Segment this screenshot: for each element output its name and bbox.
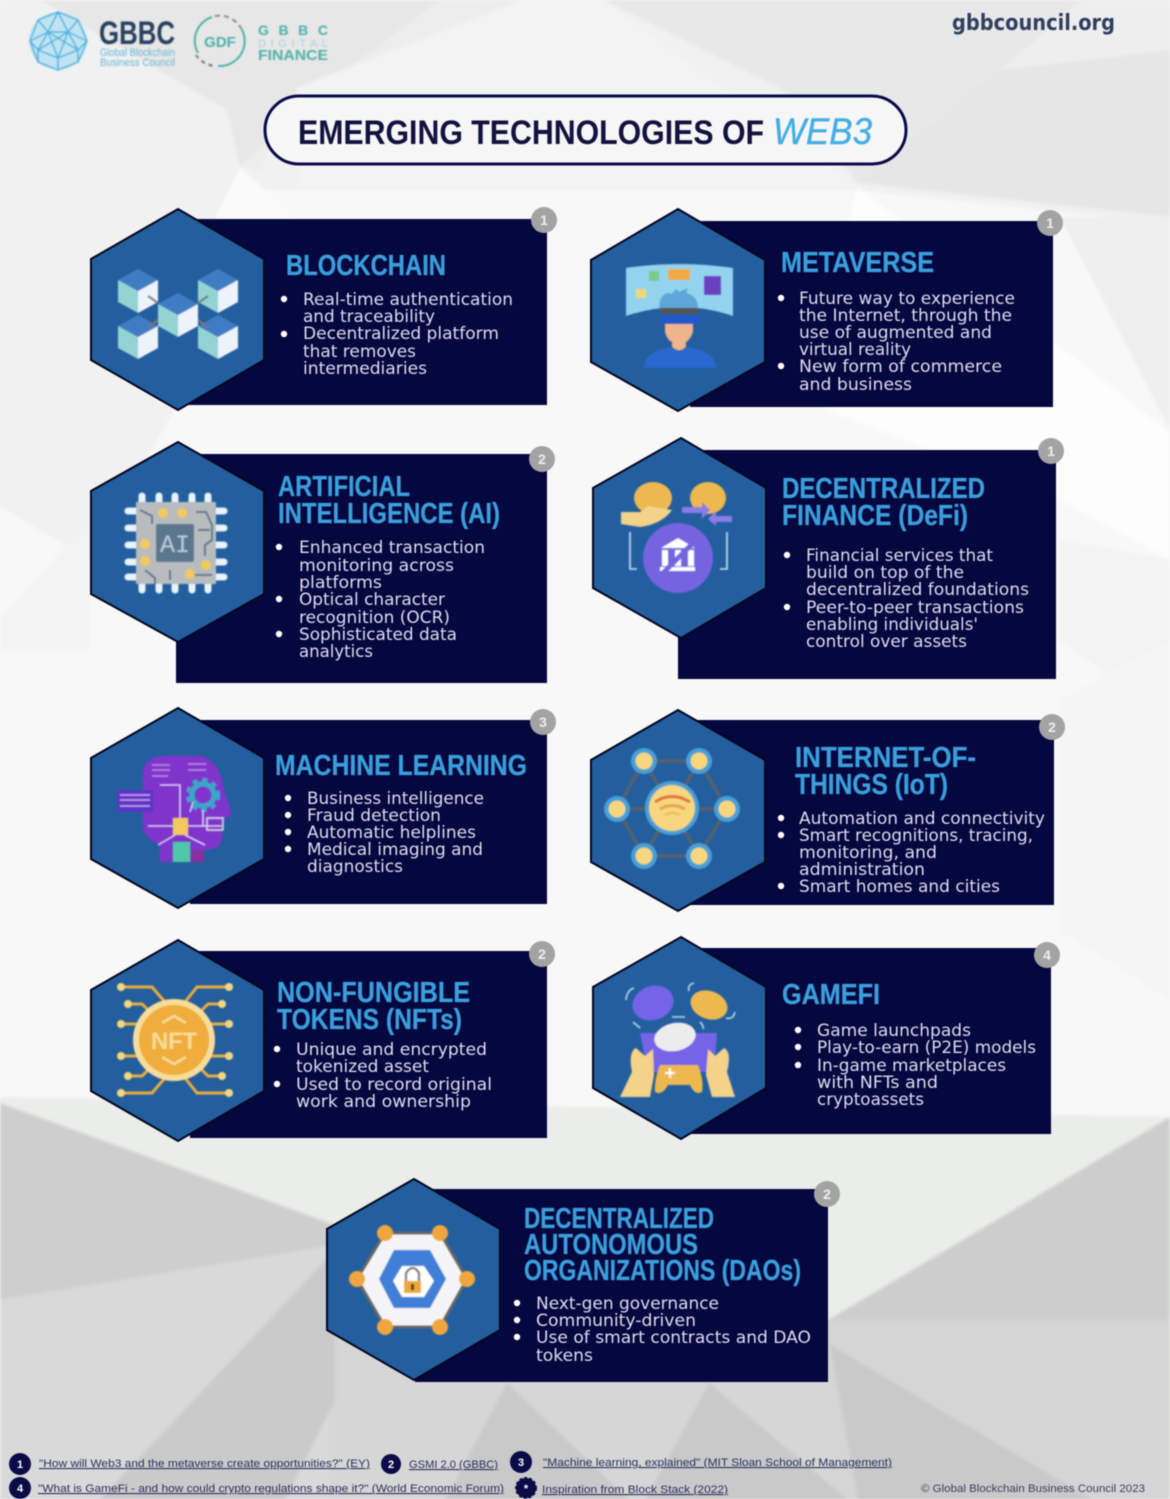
logo: GBBC: Business Council <box>100 57 175 69</box>
icon: NFT chip coin: NFT <box>151 1028 197 1055</box>
panel: decentralized finance: FINANCE (DeFi) <box>782 500 968 532</box>
footer: sources: 1 <box>17 1459 23 1471</box>
panel: gamefi: Play-to-earn (P2E) models <box>817 1038 1036 1058</box>
panel: blockchain: 1 <box>540 212 548 228</box>
panel: internet of things: Automation and connectivity <box>799 809 1045 829</box>
panel: gamefi: with NFTs and <box>817 1073 938 1093</box>
panel: decentralized finance: enabling individuals' <box>806 615 978 635</box>
panel: decentralized autonomous organizations: tokens <box>536 1346 593 1366</box>
panel: internet of things: INTERNET-OF- <box>795 742 976 774</box>
panel: artificial intelligence: Sophisticated data <box>299 625 457 645</box>
panel: decentralized autonomous organizations: Next-gen governance <box>536 1294 719 1314</box>
panel: decentralized finance: decentralized foundations <box>806 580 1029 600</box>
logo: GBBC Digital Finance: GBBC <box>258 22 328 38</box>
panel: blockchain: Decentralized platform <box>303 324 499 344</box>
icon: DeFi coins and crossed bank <box>621 482 732 593</box>
footer: sources: "What is GameFi - and how could crypto regulations shape it?" (World Economic Forum) <box>38 1483 504 1495</box>
panel: non-fungible tokens: NON-FUNGIBLE <box>277 977 470 1009</box>
panel: machine learning: MACHINE LEARNING <box>275 750 527 782</box>
panel: machine learning: Medical imaging and <box>307 840 483 860</box>
panel: decentralized autonomous organizations: 2 <box>823 1186 831 1202</box>
icon: IoT network <box>604 748 740 869</box>
footer: sources: GSMI 2.0 (GBBC) <box>409 1459 498 1471</box>
panel: internet of things: THINGS (IoT) <box>795 769 948 801</box>
panel: decentralized autonomous organizations: AUTONOMOUS <box>524 1229 698 1261</box>
logo: GBBC: Global Blockchain <box>100 47 175 59</box>
panel: decentralized finance: Peer-to-peer transactions <box>806 598 1024 618</box>
panel: blockchain: intermediaries <box>303 359 427 379</box>
footer: sources: 4 <box>17 1483 24 1495</box>
panel: machine learning: diagnostics <box>307 857 403 877</box>
copyright: © Global Blockchain Business Council 2023 <box>921 1483 1145 1495</box>
logo: GBBC Digital Finance: FINANCE <box>258 47 328 64</box>
title <box>265 96 906 164</box>
panel: decentralized autonomous organizations: Use of smart contracts and DAO <box>536 1328 811 1348</box>
panel: metaverse: New form of commerce <box>799 357 1002 377</box>
panel: decentralized autonomous organizations: ORGANIZATIONS (DAOs) <box>524 1255 801 1287</box>
panel: non-fungible tokens: TOKENS (NFTs) <box>277 1004 462 1036</box>
logo: GBBC Digital Finance <box>195 16 328 66</box>
panel: internet of things: monitoring, and <box>799 843 937 863</box>
panel: artificial intelligence: INTELLIGENCE (AI) <box>278 498 500 530</box>
panel: decentralized finance: 1 <box>1047 443 1055 459</box>
icon: AI chip: AI <box>160 531 190 560</box>
panel: machine learning <box>91 708 556 908</box>
panel: decentralized finance: Financial services that <box>806 546 993 566</box>
panel: gamefi: 4 <box>1043 947 1051 963</box>
title: EMERGING TECHNOLOGIES OF <box>298 114 764 152</box>
panel: artificial intelligence: ARTIFICIAL <box>278 471 410 503</box>
website url: gbbcouncil.org <box>952 11 1115 36</box>
panel: machine learning: Automatic helplines <box>307 823 476 843</box>
panel: non-fungible tokens: Unique and encrypted <box>296 1040 487 1060</box>
panel: non-fungible tokens: tokenized asset <box>296 1057 429 1077</box>
icon: blockchain cubes <box>118 269 238 359</box>
panel: machine learning: 3 <box>539 714 547 730</box>
panel: metaverse: Future way to experience <box>799 289 1015 309</box>
panel: gamefi: In-game marketplaces <box>817 1056 1006 1076</box>
logo: GBBC: GBBC <box>99 15 175 51</box>
icon: GameFi controller and coins <box>620 980 735 1097</box>
panel: decentralized autonomous organizations <box>327 1179 840 1382</box>
icon: machine learning head <box>117 756 232 862</box>
panel: gamefi: cryptoassets <box>817 1090 924 1110</box>
panel: blockchain: BLOCKCHAIN <box>286 250 446 282</box>
icon: metaverse headset user <box>626 264 733 368</box>
panel: blockchain <box>91 207 557 410</box>
panel: artificial intelligence: recognition (OCR) <box>299 608 450 628</box>
footer: sources <box>9 1451 892 1499</box>
footer: sources: 2 <box>388 1459 394 1471</box>
logo: GBBC Digital Finance: DIGITAL <box>258 38 328 50</box>
icon: AI chip <box>128 496 224 590</box>
panel: gamefi <box>593 937 1060 1139</box>
panel: internet of things: Smart recognitions, tracing, <box>799 826 1033 846</box>
panel: gamefi: GAMEFI <box>782 979 880 1011</box>
panel: blockchain: and traceability <box>303 307 435 327</box>
panel: artificial intelligence <box>91 442 555 683</box>
panel: decentralized autonomous organizations: DECENTRALIZED <box>524 1203 714 1235</box>
panel: metaverse: use of augmented and <box>799 323 992 343</box>
panel: non-fungible tokens: work and ownership <box>296 1092 471 1112</box>
panel: metaverse: and business <box>799 375 912 395</box>
panel: blockchain: that removes <box>303 342 416 362</box>
panel: internet of things: administration <box>799 860 925 880</box>
footer: sources: * <box>524 1483 529 1495</box>
title: WEB3 <box>773 111 872 152</box>
panel: artificial intelligence: 2 <box>538 451 546 467</box>
panel: blockchain: Real-time authentication <box>303 290 513 310</box>
panel: decentralized autonomous organizations: Community-driven <box>536 1311 696 1331</box>
panel: metaverse: 1 <box>1046 215 1054 231</box>
footer: sources: 3 <box>518 1457 524 1469</box>
panel: decentralized finance: build on top of the <box>806 563 964 583</box>
logo: GBBC <box>29 12 175 70</box>
icon: DAO lock hexagon <box>349 1225 475 1335</box>
panel: artificial intelligence: monitoring across <box>299 556 454 576</box>
icon: NFT chip coin <box>117 983 233 1097</box>
panel: internet of things <box>591 710 1065 911</box>
panel: metaverse <box>591 209 1063 411</box>
panel: non-fungible tokens <box>91 940 555 1141</box>
panel: non-fungible tokens: Used to record original <box>296 1075 492 1095</box>
panel: artificial intelligence: analytics <box>299 642 373 662</box>
panel: decentralized finance <box>593 438 1064 679</box>
panel: metaverse: virtual reality <box>799 340 911 360</box>
panel: artificial intelligence: Optical character <box>299 590 445 610</box>
panel: artificial intelligence: Enhanced transaction <box>299 538 485 558</box>
panel: metaverse: METAVERSE <box>781 247 934 279</box>
panel: gamefi: Game launchpads <box>817 1021 971 1041</box>
panel: machine learning: Business intelligence <box>307 789 484 809</box>
panel: internet of things: 2 <box>1048 719 1056 735</box>
panel: decentralized finance: DECENTRALIZED <box>782 473 985 505</box>
panel: internet of things: Smart homes and cities <box>799 877 1000 897</box>
panel: decentralized finance: control over assets <box>806 632 967 652</box>
footer: sources: Inspiration from Block Stack (2022) <box>542 1484 728 1496</box>
panel: artificial intelligence: platforms <box>299 573 382 593</box>
panel: non-fungible tokens: 2 <box>538 946 546 962</box>
panel: metaverse: the Internet, through the <box>799 306 1012 326</box>
panel: machine learning: Fraud detection <box>307 806 441 826</box>
footer: sources: "How will Web3 and the metaverse create opportunities?" (EY) <box>39 1458 370 1470</box>
logo: GBBC Digital Finance: GDF <box>204 34 236 51</box>
footer: sources: "Machine learning, explained" (MIT Sloan School of Management) <box>543 1457 892 1469</box>
